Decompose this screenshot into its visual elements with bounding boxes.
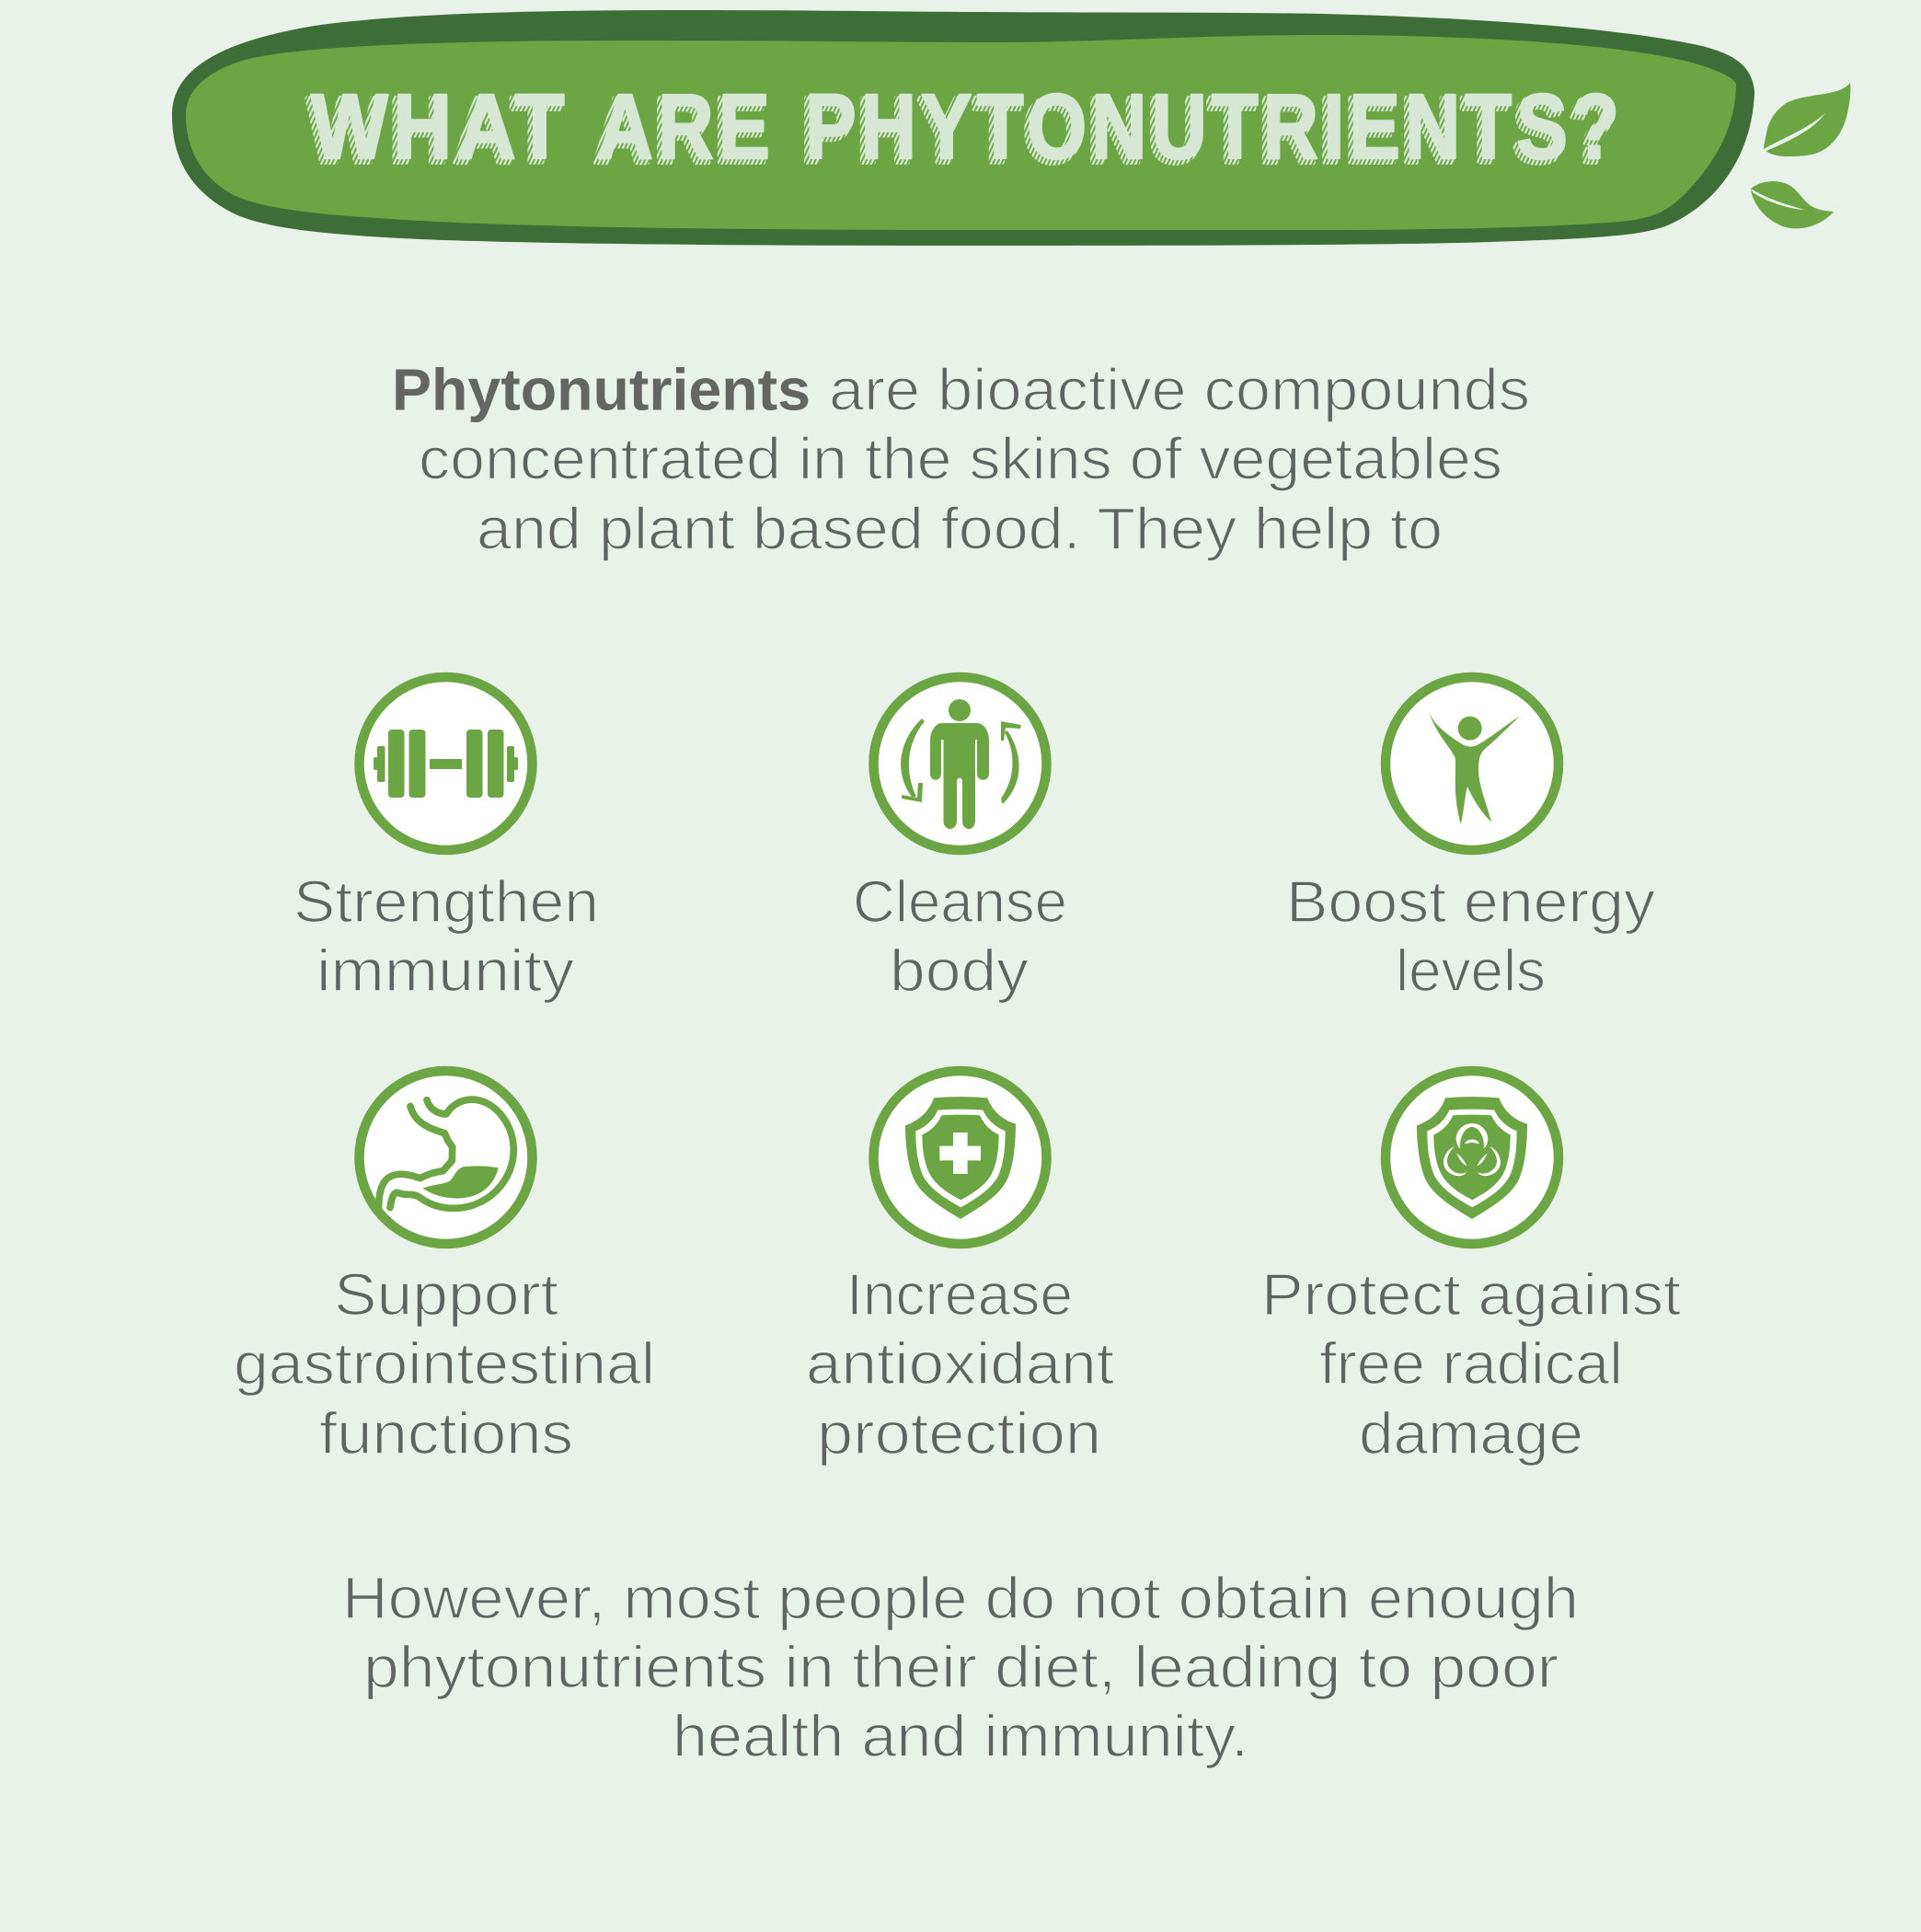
label: protect against free radical damage <box>1261 1261 1681 1466</box>
label: strengthen immunity: Strengthen <box>293 868 599 935</box>
label: increase antioxidant protection: protection <box>817 1400 1101 1466</box>
panel: boost energy levels <box>1286 677 1655 1004</box>
intro paragraph <box>392 357 1530 561</box>
label: cleanse body: Cleanse <box>853 868 1067 935</box>
icon: dumbbell <box>359 677 532 850</box>
title text <box>311 75 1624 178</box>
intro paragraph: Phytonutrients <box>392 357 811 423</box>
panel: support gastrointestinal functions <box>234 1071 655 1466</box>
label: boost energy levels: levels <box>1396 937 1546 1004</box>
label: boost energy levels: Boost energy <box>1286 868 1655 935</box>
icon: energetic figure <box>1386 677 1559 850</box>
panel: protect against free radical damage <box>1261 1071 1681 1466</box>
label: strengthen immunity: immunity <box>316 937 574 1004</box>
label: increase antioxidant protection: Increase <box>846 1261 1073 1328</box>
panel: cleanse body <box>853 677 1067 1004</box>
icon: stomach with leaf <box>359 1071 532 1244</box>
label: protect against free radical damage: damage <box>1359 1400 1583 1466</box>
title banner <box>172 10 1754 246</box>
banner outer border <box>172 10 1754 246</box>
icon: bottom leaf <box>1751 181 1834 228</box>
label: support gastrointestinal functions: functions <box>319 1400 573 1466</box>
label: protect against free radical damage: free radical <box>1319 1330 1623 1397</box>
banner inner fill <box>186 35 1736 230</box>
label: cleanse body <box>853 868 1067 1004</box>
title shadow hatch: PHYTONUTRIENTS? <box>801 79 1620 182</box>
label: support gastrointestinal functions <box>234 1261 655 1466</box>
title shadow hatch <box>307 79 1620 182</box>
label: support gastrointestinal functions: gastrointestinal <box>234 1330 655 1397</box>
icon: top leaf <box>1764 83 1850 156</box>
intro paragraph: are bioactive compounds <box>829 357 1530 423</box>
label: increase antioxidant protection <box>806 1261 1114 1466</box>
icon: shield with biohazard <box>1386 1071 1559 1244</box>
panel: strengthen immunity <box>293 677 599 1004</box>
closing paragraph <box>342 1565 1579 1769</box>
title text: WHAT <box>311 75 569 178</box>
icon: person with cycle arrows <box>874 677 1047 850</box>
title shadow hatch: ARE <box>593 79 771 182</box>
title text: ARE <box>597 75 775 178</box>
closing paragraph: phytonutrients in their diet, leading to poor <box>363 1634 1559 1700</box>
closing paragraph: health and immunity. <box>673 1703 1248 1769</box>
label: cleanse body: body <box>890 937 1029 1004</box>
intro paragraph: and plant based food. They help to <box>477 495 1443 561</box>
title shadow hatch: WHAT <box>307 79 566 182</box>
icon: shield with cross <box>874 1071 1047 1244</box>
title text: PHYTONUTRIENTS? <box>805 75 1624 178</box>
label: boost energy levels <box>1286 868 1655 1004</box>
label: strengthen immunity <box>293 868 599 1004</box>
intro paragraph: concentrated in the skins of vegetables <box>419 425 1502 491</box>
closing paragraph: However, most people do not obtain enough <box>342 1565 1579 1631</box>
label: support gastrointestinal functions: Support <box>334 1261 558 1328</box>
panel: increase antioxidant protection <box>806 1071 1114 1466</box>
label: increase antioxidant protection: antioxidant <box>806 1330 1114 1397</box>
label: protect against free radical damage: Protect against <box>1261 1261 1681 1328</box>
